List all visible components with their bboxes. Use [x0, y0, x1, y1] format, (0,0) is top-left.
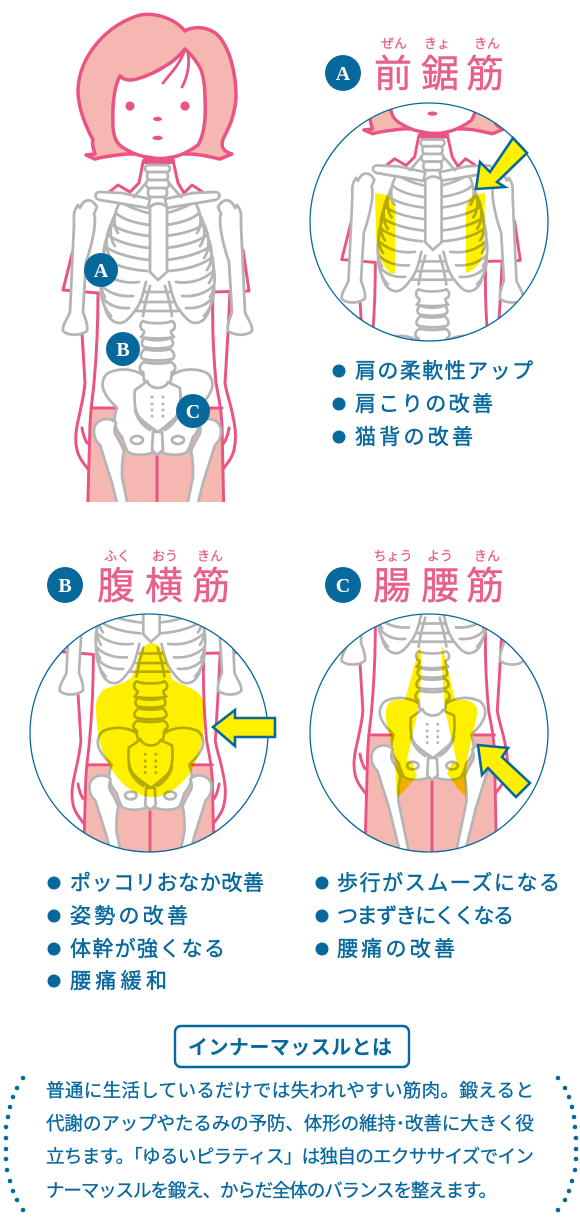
- list A: benefits: 肩の柔軟性アップ: [355, 360, 533, 383]
- heading A: serratus anterior: A: [336, 63, 351, 85]
- list C: benefits: つまずきにくくなる: [337, 905, 514, 928]
- heading A: serratus anterior: 前鋸筋: [374, 54, 504, 96]
- heading C: iliopsoas: C: [336, 575, 350, 597]
- heading C: iliopsoas: よう: [427, 548, 453, 564]
- explanation text: 立ちます。「ゆるいピラティス」は独自のエクササイズでイン: [46, 1146, 534, 1167]
- list C: benefits: 歩行がスムーズになる: [337, 872, 560, 895]
- explanation text: 代謝のアップやたるみの予防、体形の維持･改善に大きく役: [46, 1113, 534, 1134]
- explanation text: [46, 1080, 534, 1201]
- marker C on body: C: [186, 401, 200, 423]
- dotted bracket right: [556, 1076, 578, 1212]
- marker B on body: B: [116, 339, 130, 361]
- list C: benefits: 腰痛の改善: [337, 938, 455, 961]
- list B: benefits: [48, 872, 264, 993]
- heading B: transversus abdominis: [47, 548, 230, 608]
- list B: benefits: ポッコリおなか改善: [70, 872, 264, 895]
- heading B: transversus abdominis: 腹横筋: [97, 566, 230, 608]
- panel A: circular detail: [309, 102, 549, 342]
- list B: benefits: 体幹が強くなる: [70, 938, 225, 961]
- marker A on body: A: [94, 260, 109, 282]
- list A: benefits: 猫背の改善: [355, 426, 473, 449]
- heading B: transversus abdominis: きん: [197, 548, 223, 564]
- heading C: iliopsoas: ちょう: [373, 548, 413, 564]
- explanation text: 普通に生活しているだけでは失われやすい筋肉。鍛えると: [46, 1080, 534, 1101]
- marker C on body: [176, 394, 210, 428]
- heading C: iliopsoas: 腸腰筋: [373, 566, 504, 608]
- explanation text: ナーマッスルを鍛え、からだ全体のバランスを整えます。: [46, 1180, 497, 1201]
- heading B: transversus abdominis: B: [58, 575, 72, 597]
- dotted bracket left: [4, 1076, 25, 1212]
- heading A: serratus anterior: きょ: [424, 36, 450, 51]
- list A: benefits: [332, 360, 533, 449]
- main figure: woman with skeleton: [62, 12, 254, 502]
- heading B: transversus abdominis: ふく: [104, 548, 130, 564]
- panel C: circular detail: [309, 613, 549, 853]
- list C: benefits: [316, 872, 560, 961]
- list B: benefits: 腰痛緩和: [70, 970, 167, 993]
- marker A on body: [84, 253, 118, 287]
- list A: benefits: 肩こりの改善: [355, 393, 493, 416]
- heading A: serratus anterior: きん: [474, 36, 500, 51]
- inner muscle heading box: インナーマッスルとは: [188, 1037, 392, 1059]
- panel B: circular detail: [29, 613, 276, 853]
- heading C: iliopsoas: きん: [474, 548, 500, 564]
- list B: benefits: 姿勢の改善: [70, 905, 188, 928]
- heading B: transversus abdominis: おう: [152, 548, 178, 564]
- heading C: iliopsoas: [325, 548, 504, 608]
- inner muscle heading box: [175, 1026, 409, 1067]
- heading A: serratus anterior: ぜん: [381, 36, 407, 51]
- marker B on body: [106, 332, 140, 366]
- heading A: serratus anterior: [325, 36, 504, 96]
